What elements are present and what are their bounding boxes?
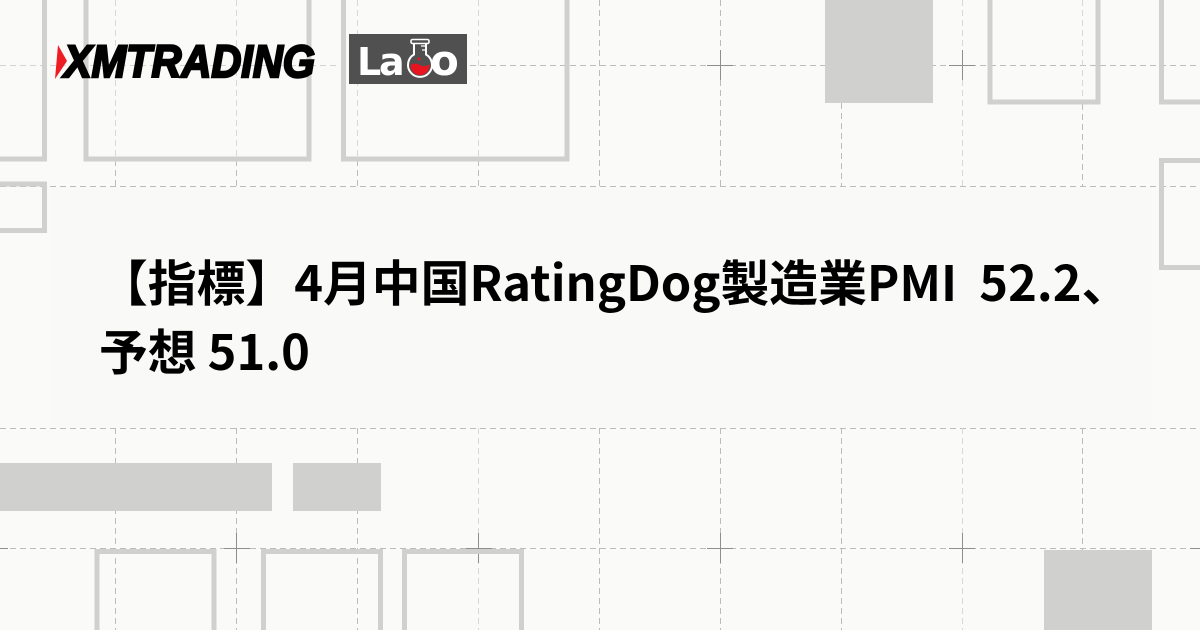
logo: XMTRADING: [55, 40, 316, 84]
icon: flask: [408, 40, 432, 77]
logo: Lab: o: [430, 36, 459, 84]
title panel: [52, 187, 1152, 428]
title: 【指標】4月中国RatingDog製造業PMI 52.2、 予想 51.0: [99, 245, 1130, 385]
logo: Lab: [349, 34, 467, 84]
wordmark letters: L: [357, 40, 381, 84]
icon: red arrow: [55, 45, 67, 79]
logo: Lab: a: [379, 40, 405, 84]
